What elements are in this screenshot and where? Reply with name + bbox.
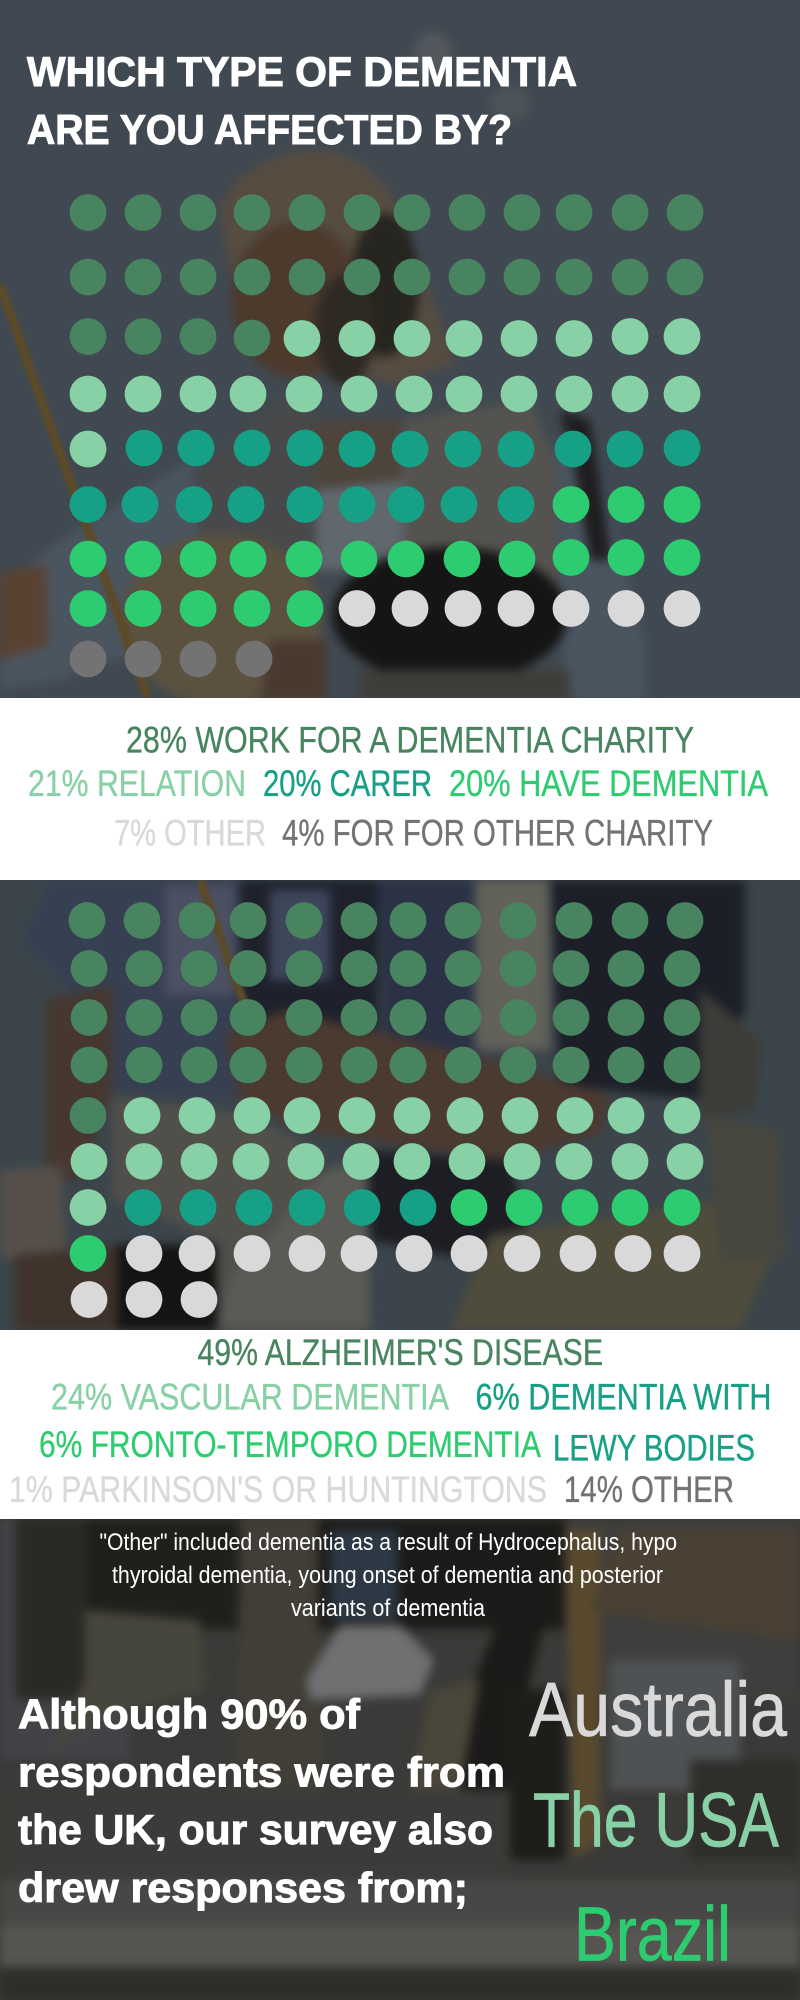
- heading: survey reach: the UK, our survey also: [18, 1806, 493, 1853]
- panel: dementia types key: [0, 1330, 800, 1519]
- key text: respondent relationship: 28% WORK FOR A DEMENTIA CHARITY: [126, 720, 694, 760]
- note: other types of dementia: [100, 1529, 677, 1622]
- key text: respondent relationship: 21% RELATION: [28, 763, 246, 804]
- dot chart: respondent relationship: [70, 194, 703, 677]
- key text: respondent relationship: [28, 720, 768, 854]
- country list: Brazil: [574, 1892, 731, 1978]
- key text: respondent relationship: 7% OTHER: [114, 812, 266, 854]
- dots: other 14%: [71, 1235, 700, 1318]
- country list: [529, 1667, 787, 1978]
- key text: dementia types: [9, 1332, 772, 1510]
- key text: dementia types: 6% FRONTO-TEMPORO DEMENTIA: [39, 1424, 541, 1465]
- note: other types of dementia: "Other" included dementia as a result of Hydrocephalus, hypo: [100, 1529, 677, 1556]
- title: [27, 48, 577, 153]
- dot chart: dementia types: [69, 902, 703, 1318]
- title: WHICH TYPE OF DEMENTIA: [27, 48, 577, 95]
- dots: alzheimer's disease 49%: [69, 902, 703, 1134]
- key text: respondent relationship: 20% CARER: [263, 763, 432, 804]
- dots: relation 21%: [70, 318, 700, 467]
- heading: survey reach: [18, 1690, 505, 1911]
- panel: respondents key: [0, 698, 800, 880]
- key text: dementia types: LEWY BODIES: [553, 1428, 755, 1468]
- heading: survey reach: respondents were from: [18, 1748, 505, 1796]
- note: other types of dementia: thyroidal dementia, young onset of dementia and posterior: [112, 1562, 663, 1589]
- heading: survey reach: Although 90% of: [18, 1690, 361, 1738]
- note: other types of dementia: variants of dementia: [291, 1595, 486, 1622]
- title: ARE YOU AFFECTED BY?: [27, 106, 512, 153]
- dots: work for a dementia charity 28%: [70, 194, 703, 356]
- photo background: legs, decking and wicker basket: [0, 1519, 800, 2000]
- photo background: child and man seated: [0, 880, 800, 1330]
- key text: dementia types: 1% PARKINSON'S OR HUNTINGTONS: [9, 1469, 547, 1510]
- dots: have dementia 20%: [70, 486, 700, 627]
- photo background: woman and child fishing: [0, 0, 800, 706]
- dots: other charity 4%: [70, 641, 272, 677]
- key text: dementia types: 49% ALZHEIMER'S DISEASE: [198, 1332, 603, 1373]
- key text: dementia types: 24% VASCULAR DEMENTIA: [51, 1376, 449, 1418]
- dots: other 7%: [339, 590, 700, 627]
- dots: carer 20%: [70, 430, 700, 523]
- dots: fronto-temporo dementia 6%: [70, 1189, 700, 1272]
- dots: vascular dementia 24%: [70, 1097, 703, 1226]
- key text: dementia types: 14% OTHER: [564, 1469, 734, 1510]
- dots: dementia with lewy bodies 6%: [125, 1189, 436, 1226]
- heading: survey reach: drew responses from;: [18, 1864, 468, 1911]
